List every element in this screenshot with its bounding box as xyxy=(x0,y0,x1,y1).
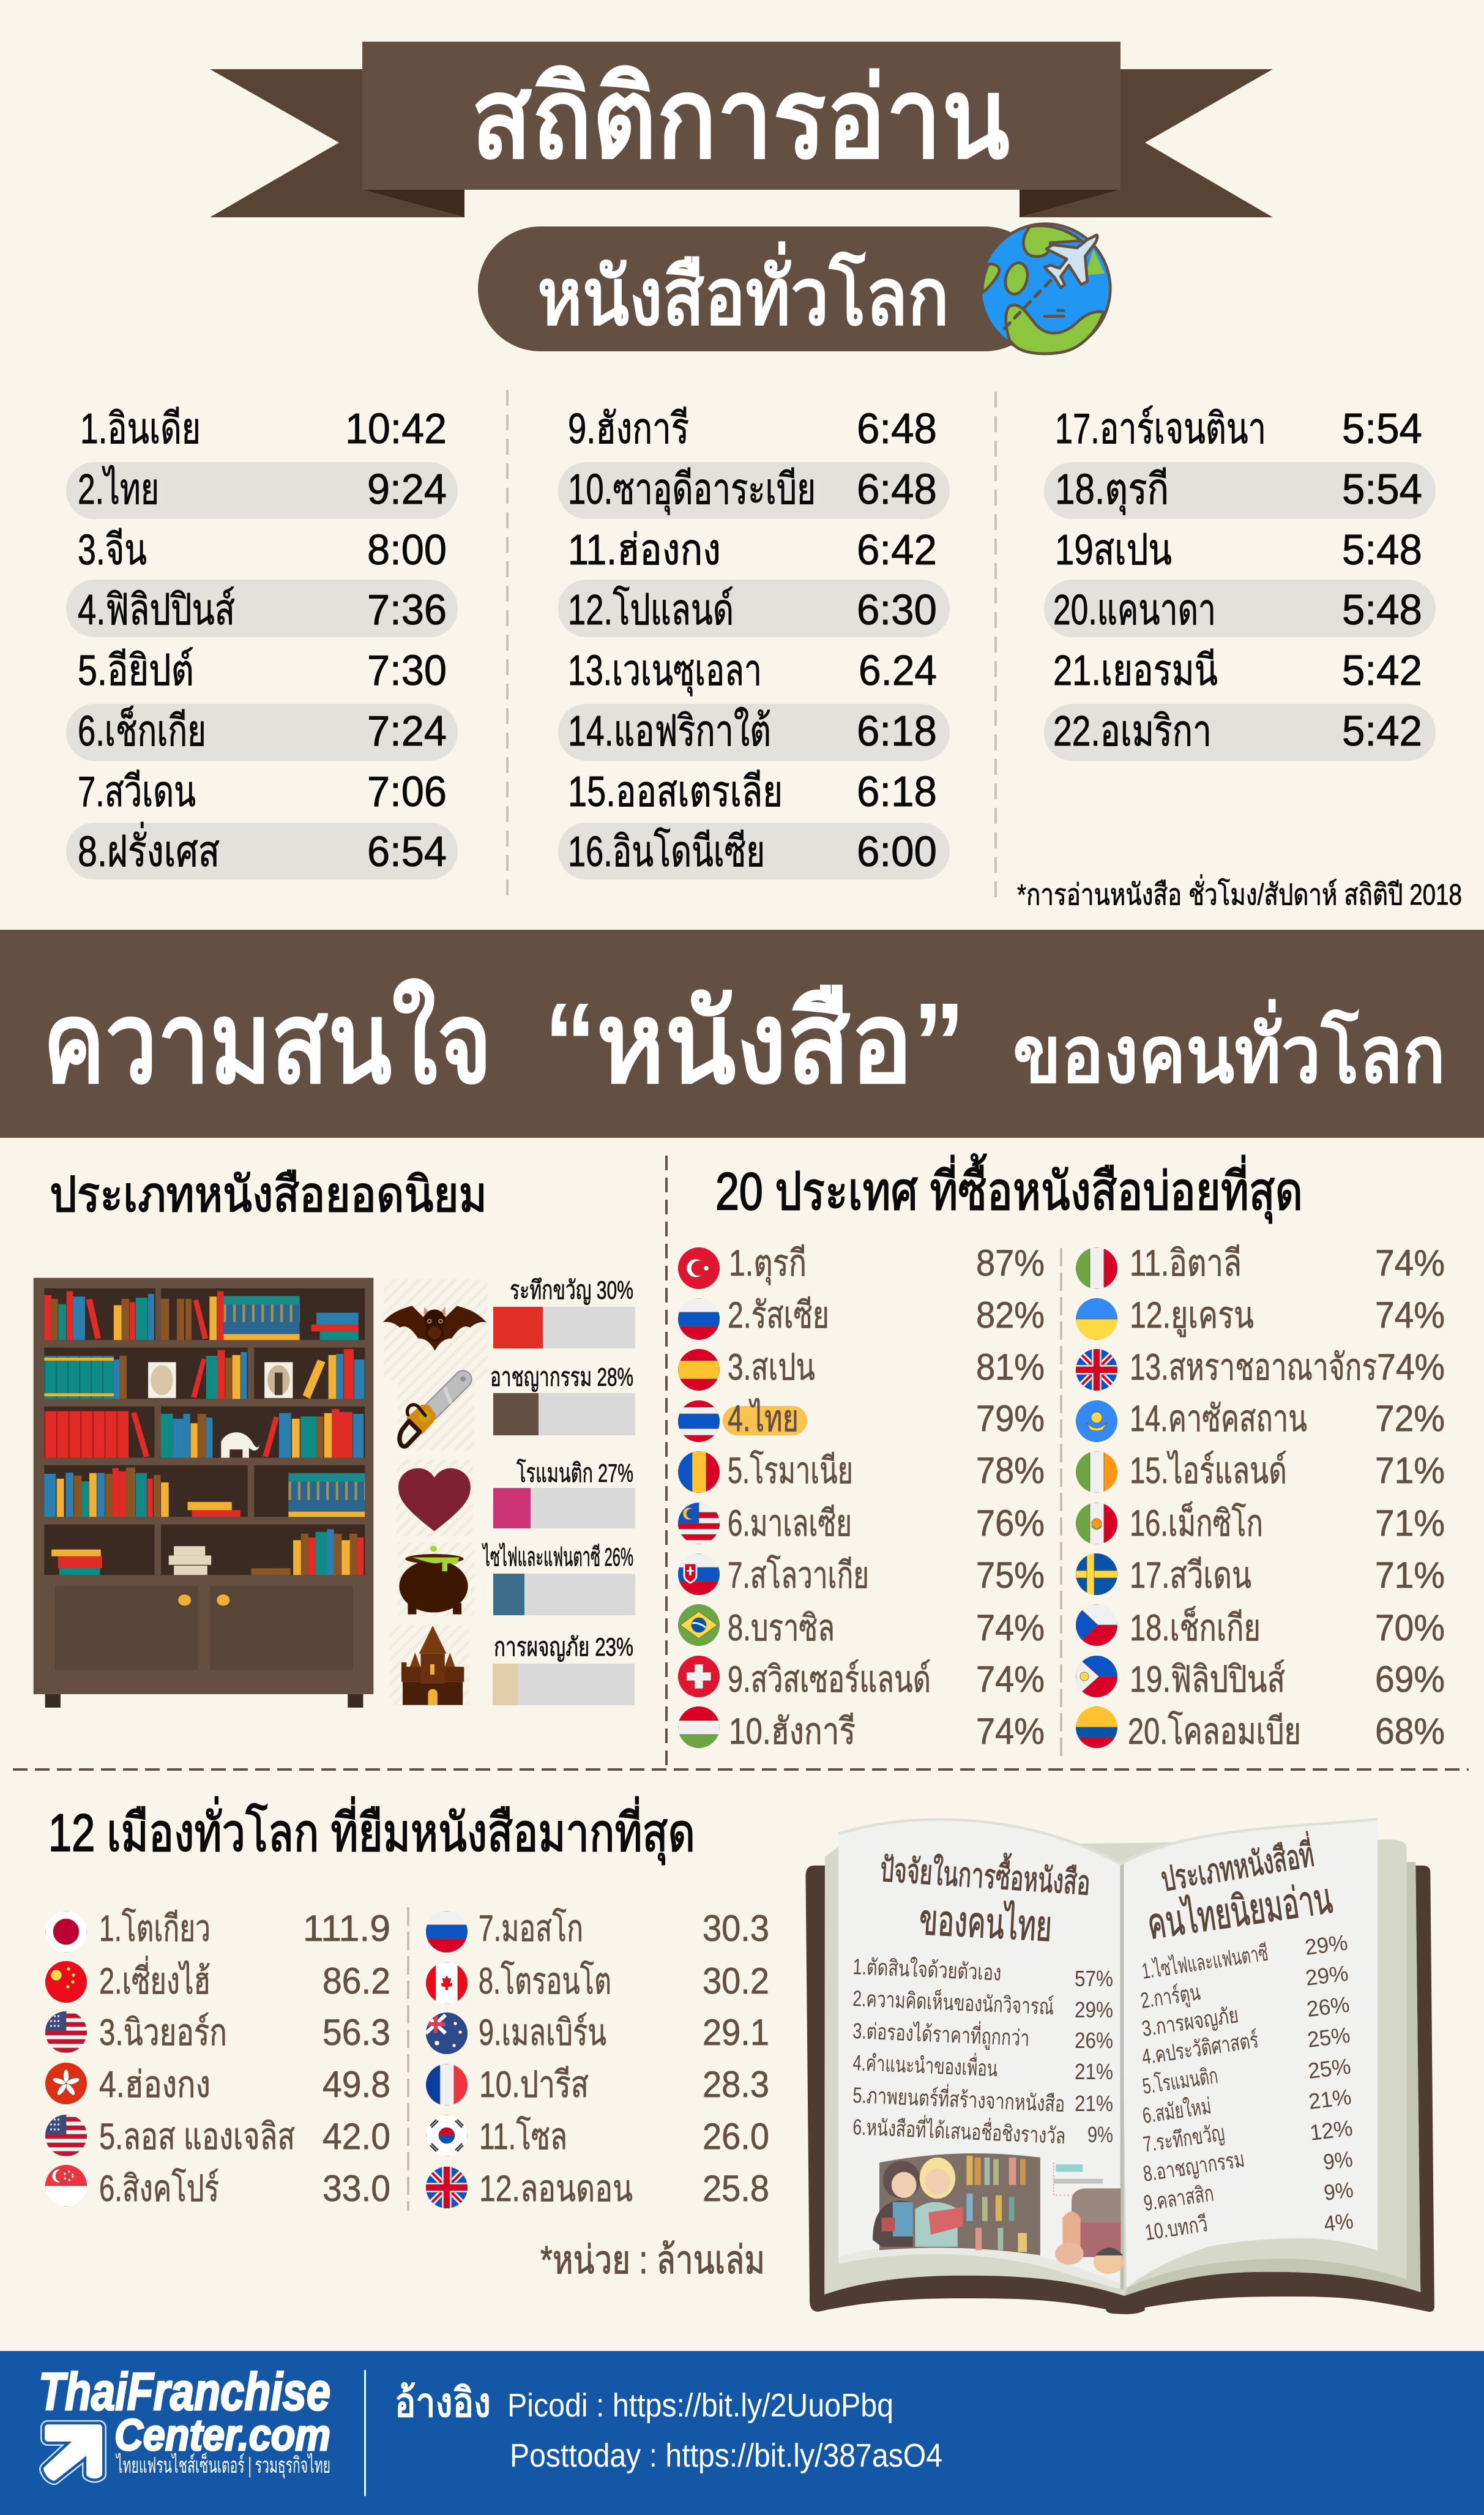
column 1: 7:30 xyxy=(367,646,447,694)
country list column 1: 1.ตุรกี xyxy=(729,1243,807,1285)
icon: cauldron xyxy=(399,1545,468,1614)
country list column 2: 20.โคลอมเบีย xyxy=(1128,1710,1301,1752)
column 3: 5:54 xyxy=(1342,465,1422,513)
row highlight pills xyxy=(66,462,1436,880)
right page list: 12% xyxy=(1308,2115,1354,2145)
logo: ThaiFranchise Center.com: ไทยแฟรนไชส์เซ็นเตอร์ | รวมธุรกิจไทย xyxy=(115,2451,330,2479)
city list column 2: 10.ปารีส xyxy=(479,2064,589,2105)
column 2: 6:42 xyxy=(857,526,937,574)
bar labels: ไซไฟและแฟนตาซี 26% xyxy=(482,1542,633,1571)
left page list: 9% xyxy=(1087,2122,1113,2147)
country list column 2: 69% xyxy=(1375,1659,1445,1700)
subtitle text: หนังสือทั่วโลก xyxy=(537,241,949,342)
country list column 2: 71% xyxy=(1375,1450,1445,1491)
country list column 1: 82% xyxy=(976,1295,1045,1336)
right page list xyxy=(1139,1930,1355,2245)
column 3 xyxy=(1053,405,1422,755)
right page list: 21% xyxy=(1307,2084,1352,2114)
logo: ThaiFranchise Center.com: ThaiFranchise xyxy=(39,2363,330,2421)
references: Posttoday : https://bit.ly/387asO4 xyxy=(510,2437,942,2474)
country list column 1: 3.สเปน xyxy=(728,1347,815,1388)
city list column 2: 12.ลอนดอน xyxy=(479,2168,633,2209)
left page list: 1.ตัดสินใจด้วยตัวเอง xyxy=(852,1954,1002,1986)
right page list: 3.การผจญภัย xyxy=(1140,2002,1240,2041)
city list column 1: 3.นิวยอร์ก xyxy=(99,2012,227,2053)
column 1: 1.อินเดีย xyxy=(80,405,201,452)
column 3: 5:42 xyxy=(1342,707,1422,755)
city list column 2: 28.3 xyxy=(703,2064,769,2105)
bar labels: การผจญภัย 23% xyxy=(494,1632,633,1662)
city list column 1: 42.0 xyxy=(323,2116,390,2157)
left page list: 26% xyxy=(1075,2028,1113,2053)
left page list: 5.ภาพยนตร์ที่สร้างจากหนังสือ xyxy=(852,2080,1065,2117)
country list column 1: 4.ไทย xyxy=(728,1397,799,1439)
column 3: 21.เยอรมนี xyxy=(1053,646,1218,694)
city list column 1: 33.0 xyxy=(323,2168,390,2209)
heading: top 20 countries: 20 ประเทศ ที่ซื้อหนังสือบ่อยที่สุด xyxy=(715,1154,1303,1224)
column 3: 5:48 xyxy=(1342,586,1422,633)
country list column 2: 71% xyxy=(1375,1555,1445,1596)
list divider xyxy=(1060,1248,1062,1757)
country list column 2: 74% xyxy=(1375,1243,1445,1284)
heading: top 12 cities: 12 เมืองทั่วโลก ที่ยืมหนังสือมากที่สุด xyxy=(48,1796,695,1865)
city list column 2: 8.โตรอนโต xyxy=(479,1960,611,2001)
right page list: 6.สมัยใหม่ xyxy=(1141,2093,1213,2128)
icon backgrounds: hatch xyxy=(384,1279,488,1705)
icon: chainsaw xyxy=(400,1376,466,1446)
country list column 2: 70% xyxy=(1375,1607,1445,1648)
panel: top 12 cities borrowing books xyxy=(45,1796,769,2282)
bar group: genre share bars xyxy=(493,1307,635,1705)
country list column 2: 74% xyxy=(1377,1347,1445,1388)
column 2: 16.อินโดนีเซีย xyxy=(568,827,765,875)
country list column 2: 13.สหราชอาณาจักร xyxy=(1130,1347,1377,1388)
country list column 2: 18.เช็กเกีย xyxy=(1130,1606,1261,1648)
left page list: 6.หนังสือที่ได้เสนอชื่อชิงรางวัล xyxy=(852,2112,1066,2148)
left page list: 4.คำแนะนำของเพื่อน xyxy=(852,2047,998,2081)
country list column 1: 76% xyxy=(976,1503,1045,1544)
left page list: 21% xyxy=(1075,2059,1113,2084)
right page list: 2.การ์ตูน xyxy=(1139,1979,1202,2014)
banner subheading: ของคนทั่วโลก xyxy=(1013,999,1445,1099)
right page list: 25% xyxy=(1307,2053,1352,2083)
bar fills xyxy=(493,1307,543,1705)
column 3: 19สเปน xyxy=(1055,526,1172,574)
title text: สถิติการอ่าน xyxy=(471,55,1010,181)
illustration: readers and bookshelf xyxy=(873,2153,1124,2274)
left page list: 57% xyxy=(1075,1966,1113,1991)
left page list: 29% xyxy=(1075,1997,1113,2022)
right page heading: ประเภทหนังสือที่ xyxy=(1157,1831,1316,1899)
left page list: 3.ต่อรองได้ราคาที่ถูกกว่า xyxy=(852,2016,1030,2052)
bar labels: โรแมนติก 27% xyxy=(516,1458,633,1487)
references xyxy=(395,2380,942,2474)
country list column 1: 74% xyxy=(976,1659,1045,1700)
column 2: 9.ฮังการี xyxy=(568,405,689,452)
country list column 1: 6.มาเลเซีย xyxy=(728,1503,852,1544)
country list column 1: 5.โรมาเนีย xyxy=(728,1449,853,1491)
panel: popular book genres xyxy=(34,1167,635,1708)
icons: lower genre illustrations xyxy=(398,1468,471,1705)
section banner: book interest worldwide xyxy=(0,930,1484,1138)
column 2: 10.ซาอุดีอาระเบีย xyxy=(568,465,816,515)
column 3: 17.อาร์เจนตินา xyxy=(1055,405,1266,452)
column 1 xyxy=(78,405,447,875)
city list column 2: 30.2 xyxy=(703,1960,769,2001)
column 2: 14.แอฟริกาใต้ xyxy=(568,706,771,755)
country list column 1: 81% xyxy=(976,1347,1045,1388)
column 3: 22.อเมริกา xyxy=(1053,707,1212,755)
footer band xyxy=(0,2351,1484,2515)
icon: logo arrow xyxy=(47,2427,99,2478)
section dividers xyxy=(13,1156,1469,1769)
column 1: 2.ไทย xyxy=(78,465,159,513)
country list column 1: 9.สวิสเซอร์แลนด์ xyxy=(728,1659,931,1700)
right page heading xyxy=(1144,1831,1335,1948)
column 3: 5:54 xyxy=(1342,405,1422,452)
city list column 2: 25.8 xyxy=(703,2168,769,2209)
banner keyword: “หนังสือ” xyxy=(544,980,965,1107)
country list column 2: 16.เม็กซิโก xyxy=(1130,1501,1263,1544)
title ribbon xyxy=(210,42,1273,217)
right page list: 9% xyxy=(1322,2146,1354,2175)
column 2: 11.ฮ่องกง xyxy=(568,526,721,574)
country list column 2 xyxy=(1076,1243,1445,1752)
city list column 2: 30.3 xyxy=(703,1908,769,1949)
right page list: 8.อาชญากรรม xyxy=(1141,2147,1246,2186)
logo: ThaiFranchise Center.com xyxy=(39,2363,330,2479)
country list column 1: 2.รัสเซีย xyxy=(728,1295,829,1336)
right page list: 26% xyxy=(1305,1992,1351,2022)
icon: castle xyxy=(401,1626,464,1705)
left page list xyxy=(852,1954,1113,2148)
country list column 2: 68% xyxy=(1375,1711,1445,1752)
bar labels: ระทึกขวัญ 30% xyxy=(510,1276,633,1305)
left page list: 21% xyxy=(1075,2091,1113,2116)
bar labels: อาชญากรรม 28% xyxy=(490,1362,633,1392)
right page list: 7.ระทึกขวัญ xyxy=(1141,2120,1226,2157)
city list column 2: 29.1 xyxy=(703,2012,769,2053)
column 1: 7:06 xyxy=(367,768,447,815)
city list column 2: 11.โซล xyxy=(479,2115,567,2157)
column 2: 6:18 xyxy=(857,707,937,755)
panel: top 20 countries buying books xyxy=(678,1154,1445,1757)
bar labels xyxy=(482,1276,633,1662)
country list column 2: 71% xyxy=(1375,1503,1445,1544)
column 1: 7:36 xyxy=(367,586,447,633)
column 2: 6:48 xyxy=(857,465,937,513)
column 2: 13.เวเนซุเอลา xyxy=(568,646,762,697)
right page list: 29% xyxy=(1304,1960,1349,1990)
left page heading: ของคนไทย xyxy=(918,1896,1053,1950)
country list column 1: 10.ฮังการี xyxy=(729,1711,856,1752)
column 1: 6.เช็กเกีย xyxy=(78,706,206,755)
column 2: 6:30 xyxy=(857,586,937,633)
footer divider xyxy=(364,2370,366,2496)
column 2 xyxy=(568,405,937,875)
column 1: 5.อียิปต์ xyxy=(78,646,194,694)
column 2: 15.ออสเตรเลีย xyxy=(568,768,783,815)
column dividers xyxy=(507,390,996,903)
right page list: 25% xyxy=(1306,2022,1351,2052)
country list column 2: 74% xyxy=(1375,1295,1445,1336)
country list column 1 xyxy=(678,1243,1045,1752)
column 2: 6:18 xyxy=(857,768,937,815)
right page list: 10.บทกวี xyxy=(1143,2211,1209,2245)
city list column 1: 5.ลอส แองเจลิส xyxy=(99,2116,295,2157)
country list column 1: 79% xyxy=(976,1398,1045,1439)
city list column 1: 2.เซี่ยงไฮ้ xyxy=(99,1956,211,2001)
right page heading: คนไทยนิยมอ่าน xyxy=(1144,1874,1335,1948)
column 1: 7.สวีเดน xyxy=(78,768,196,815)
column 2: 6.24 xyxy=(859,646,937,694)
banner heading: ความสนใจ xyxy=(43,978,492,1107)
panel: open book with Thai reader stats xyxy=(806,1819,1434,2314)
right page list: 4.คประวัติศาสตร์ xyxy=(1140,2027,1260,2069)
city list column 2: 9.เมลเบิร์น xyxy=(479,2012,606,2053)
country list column 1: 74% xyxy=(976,1607,1045,1648)
column 3: 20.แคนาดา xyxy=(1053,586,1216,633)
right page list: 1.ไซไฟและแฟนตาซี xyxy=(1140,1940,1270,1984)
right page list: 9.คลาสสิก xyxy=(1142,2180,1215,2216)
right page list: 9% xyxy=(1322,2177,1355,2205)
column 2: 6:00 xyxy=(857,828,937,875)
column 1: 8.ฝรั่งเศส xyxy=(78,822,220,875)
country list column 2: 17.สวีเดน xyxy=(1130,1555,1251,1596)
country list column 1: 78% xyxy=(976,1450,1045,1491)
country list column 2: 14.คาซัคสถาน xyxy=(1130,1398,1307,1439)
icon: heart xyxy=(398,1468,471,1531)
column 3: 5:48 xyxy=(1342,526,1422,574)
references: Picodi : https://bit.ly/2UuoPbq xyxy=(507,2387,893,2424)
column 1: 10:42 xyxy=(345,405,447,452)
country list column 1: 74% xyxy=(976,1711,1045,1752)
country list column 2: 12.ยูเครน xyxy=(1130,1295,1254,1337)
column 1: 8:00 xyxy=(367,526,447,574)
city list column 2: 7.มอสโก xyxy=(479,1907,583,1949)
references: อ้างอิง xyxy=(395,2380,491,2425)
column 3: 18.ตุรกี xyxy=(1055,465,1169,515)
left page list: 2.ความคิดเห็นของนักวิจารณ์ xyxy=(852,1984,1054,2019)
right page list: 29% xyxy=(1303,1930,1349,1960)
city list column 1: 86.2 xyxy=(323,1960,390,2001)
footnote: unit: *หน่วย : ล้านเล่ม xyxy=(540,2238,765,2282)
heading: popular genres: ประเภทหนังสือยอดนิยม xyxy=(50,1167,487,1222)
city list column 1: 49.8 xyxy=(323,2064,390,2105)
city list column 1 xyxy=(45,1907,390,2209)
column 1: 9:24 xyxy=(367,465,447,513)
country list column 1: 7.สโลวาเกีย xyxy=(728,1554,869,1596)
column 2: 12.โปแลนด์ xyxy=(568,585,734,633)
city list column 2 xyxy=(426,1907,769,2209)
left page heading xyxy=(879,1845,1092,1950)
city list column 2: 26.0 xyxy=(703,2116,769,2157)
left page heading: ปัจจัยในการซื้อหนังสือ xyxy=(879,1845,1092,1902)
city list column 1: 111.9 xyxy=(303,1908,390,1949)
column 3: 5:42 xyxy=(1342,646,1422,694)
column 1: 4.ฟิลิปปินส์ xyxy=(78,586,235,633)
illustration: bookcase xyxy=(34,1278,373,1708)
highlight: Thailand xyxy=(723,1406,807,1435)
column 2: 6:48 xyxy=(857,405,937,452)
country list column 2: 72% xyxy=(1375,1398,1445,1439)
icon: globe with plane xyxy=(980,224,1110,354)
city list column 1: 56.3 xyxy=(323,2012,390,2053)
city list column 1: 4.ฮ่องกง xyxy=(99,2064,211,2105)
column 1: 3.จีน xyxy=(78,526,147,574)
country list column 1: 75% xyxy=(976,1555,1045,1596)
country list column 1: 8.บราซิล xyxy=(728,1607,835,1648)
column 1: 7:24 xyxy=(367,707,447,755)
city list column 1: 6.สิงคโปร์ xyxy=(99,2167,219,2209)
country list column 2: 11.อิตาลี xyxy=(1130,1243,1242,1284)
column 1: 6:54 xyxy=(367,828,447,875)
subtitle pill xyxy=(478,226,1047,351)
country list column 2: 15.ไอร์แลนด์ xyxy=(1130,1449,1287,1491)
book artwork xyxy=(806,1819,1434,2314)
right page list: 5.โรแมนติก xyxy=(1141,2063,1220,2099)
logo: ThaiFranchise Center.com: Center.com xyxy=(114,2411,330,2460)
country list column 2: 19.ฟิลิปปินส์ xyxy=(1130,1659,1285,1700)
city list column 1: 1.โตเกียว xyxy=(99,1907,211,1949)
right page list: 4% xyxy=(1322,2208,1355,2237)
panel: weekly reading hours ranking xyxy=(66,390,1462,911)
icon: bat xyxy=(383,1306,487,1351)
list divider xyxy=(407,1907,409,2211)
country list column 1: 87% xyxy=(976,1243,1045,1284)
